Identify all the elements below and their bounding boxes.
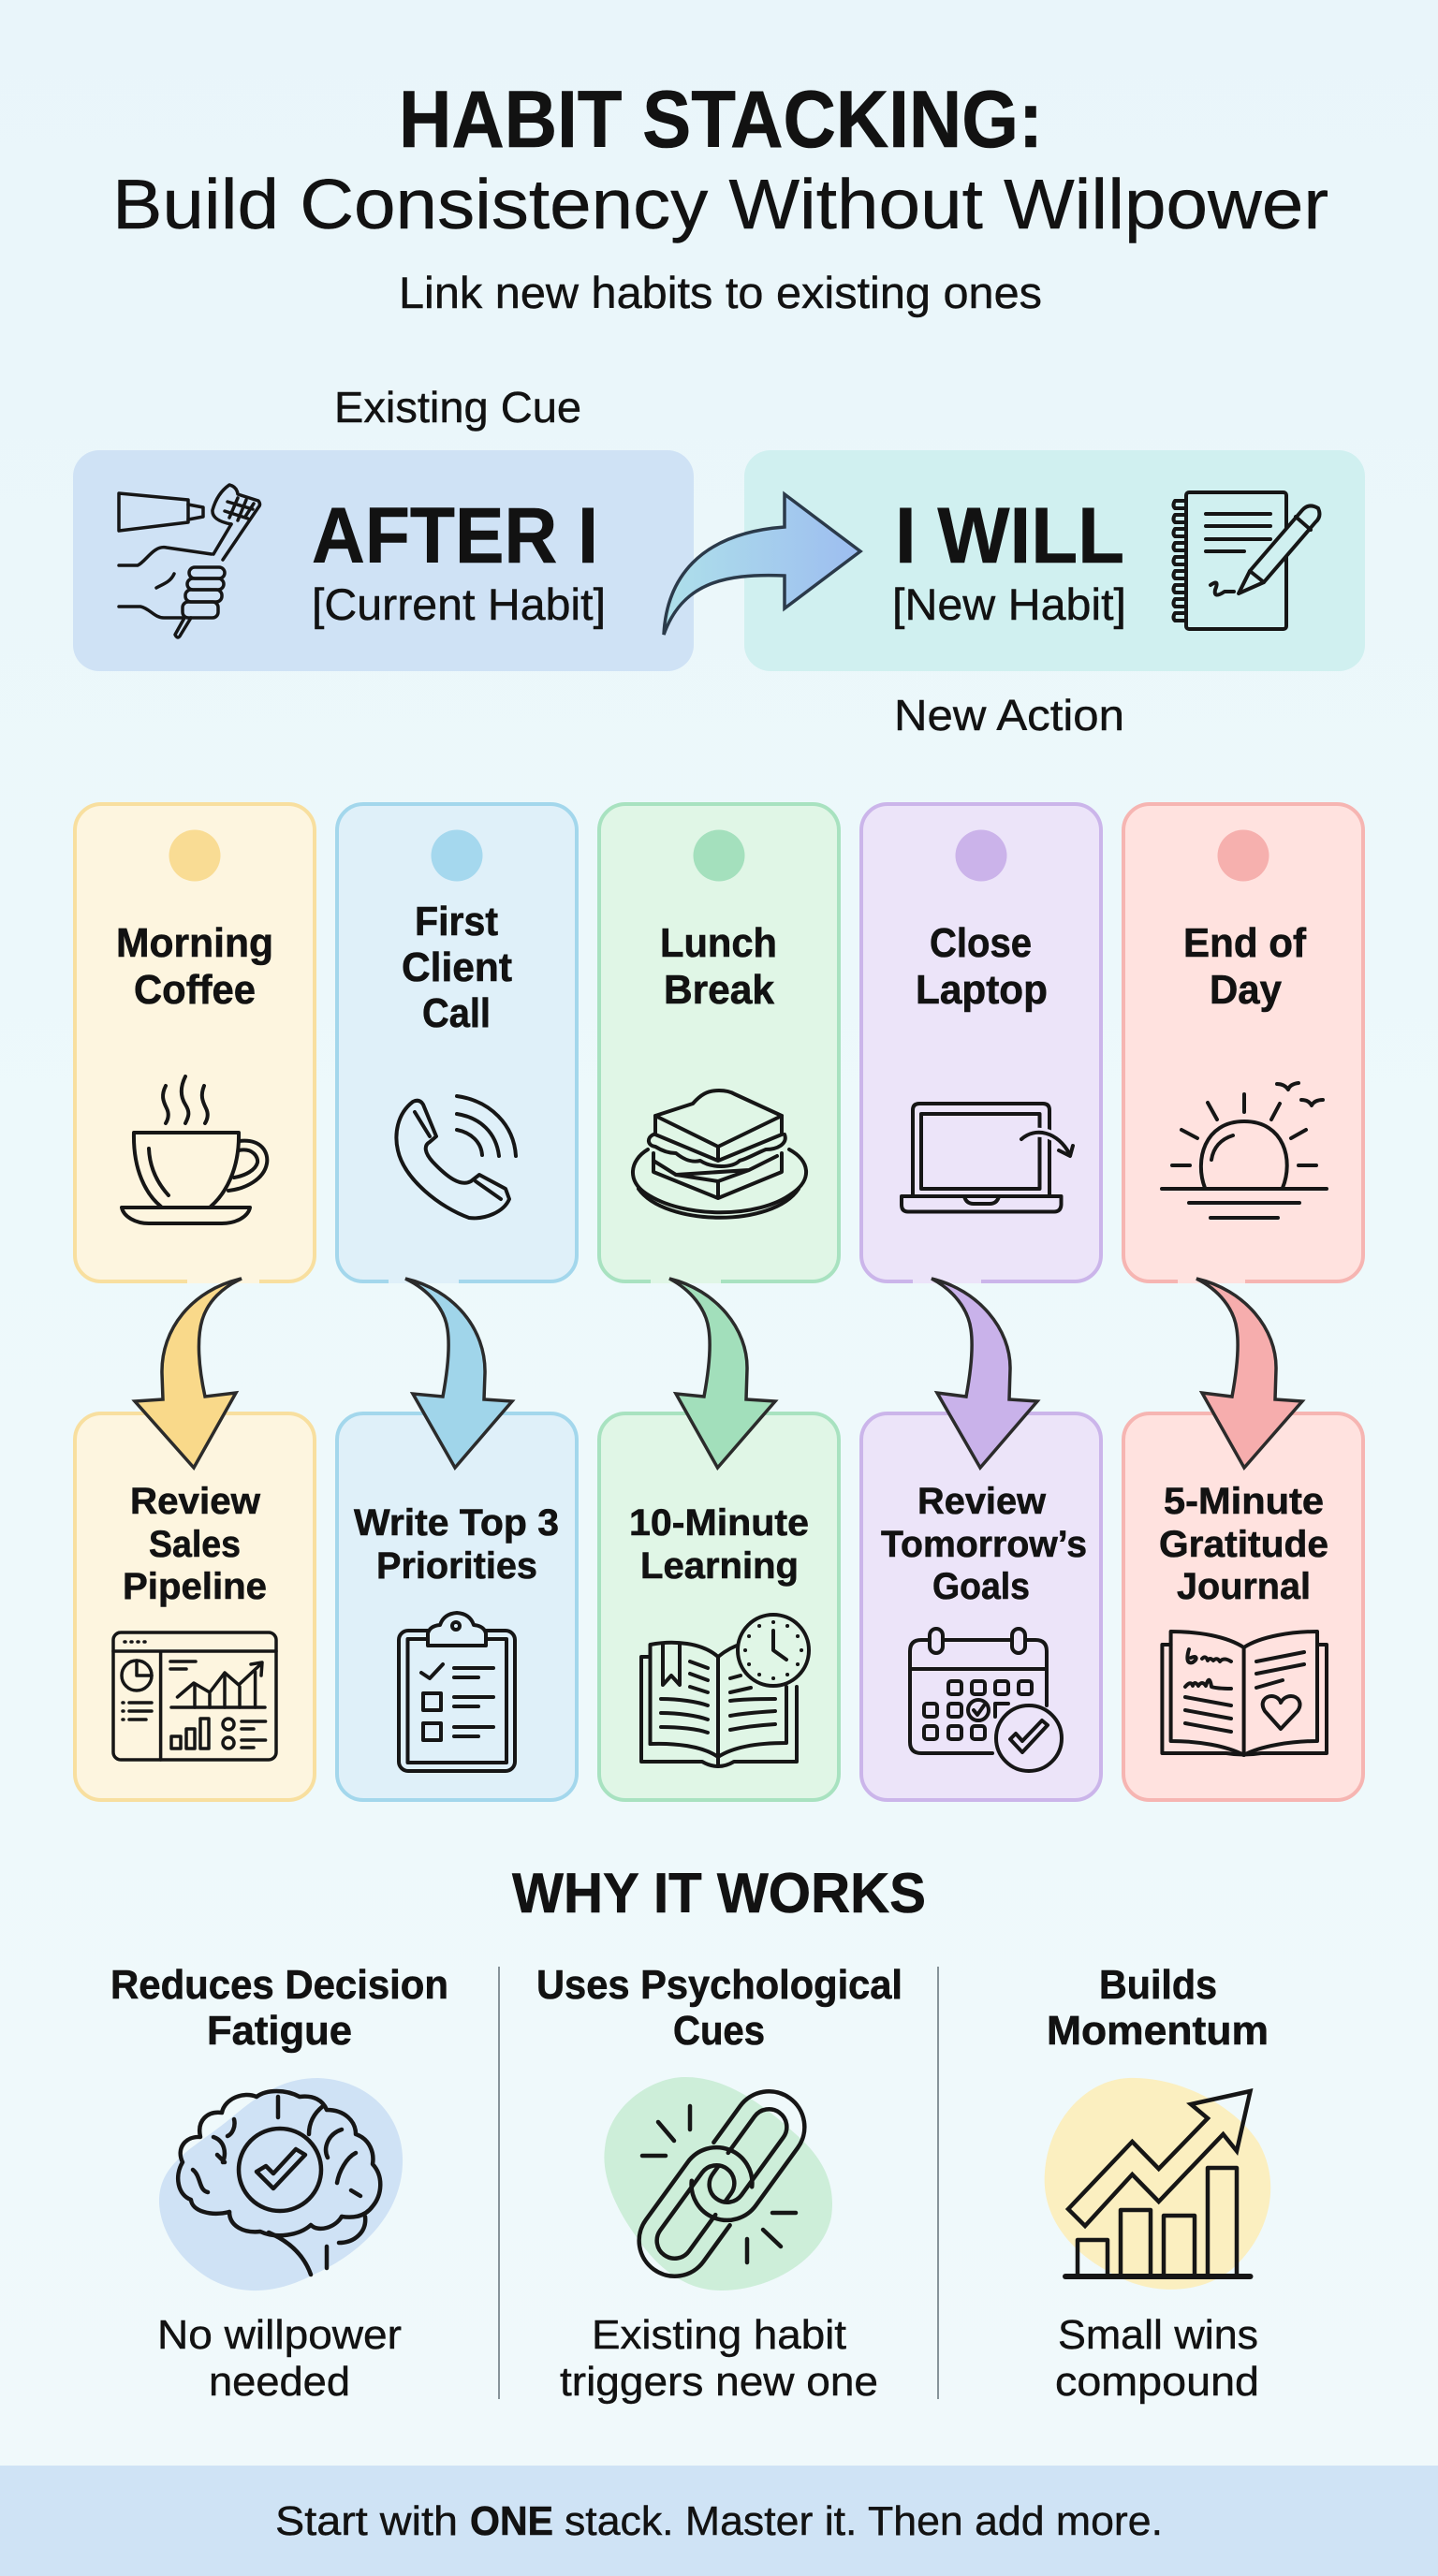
- label: [881, 1481, 1087, 1607]
- caption: Existing habit: [592, 2312, 846, 2358]
- arrow: close laptop to review tomorrow's goals: [932, 1279, 1037, 1468]
- footer banner: [0, 2466, 1438, 2576]
- label: End of: [1183, 920, 1306, 966]
- label: Tomorrow’s: [881, 1524, 1087, 1565]
- subtitle: Link new habits to existing ones: [399, 268, 1042, 317]
- dot: [693, 829, 745, 882]
- title: Build Consistency Without Willpower: [112, 165, 1328, 243]
- label: Learning: [640, 1545, 799, 1587]
- dot: [1217, 829, 1269, 882]
- label: Review: [130, 1481, 261, 1522]
- text: current habit: [Current Habit]: [312, 579, 606, 629]
- panel: new habit card review tomorrow's goals: [861, 1413, 1101, 1800]
- icon: phone: [396, 1096, 516, 1218]
- caption: triggers new one: [560, 2359, 878, 2405]
- heading: Uses Psychological: [536, 1962, 902, 2008]
- heading: after I: AFTER I: [312, 491, 598, 579]
- icon: sunset: [1162, 1083, 1327, 1218]
- dot: [169, 829, 221, 882]
- icon: open book with clock: [641, 1615, 809, 1766]
- heading: Fatigue: [207, 2008, 352, 2054]
- label: [123, 1481, 267, 1607]
- divider: [499, 1967, 938, 2399]
- heading: Reduces Decision: [110, 1962, 448, 2008]
- label: [629, 1502, 809, 1587]
- icon: rising bars and arrow on yellow blob: [1045, 2078, 1270, 2290]
- dot: [431, 829, 483, 882]
- arrow: first client call to write top 3: [405, 1279, 512, 1468]
- heading: Builds: [1099, 1962, 1217, 2008]
- label: Laptop: [916, 967, 1048, 1013]
- heading: Momentum: [1047, 2008, 1269, 2054]
- icon: coffee cup: [122, 1076, 267, 1223]
- label: Review: [917, 1481, 1047, 1522]
- label: [1183, 920, 1306, 1013]
- icon: brain with check on blue blob: [159, 2078, 403, 2291]
- arrow: end of day to gratitude journal: [1196, 1279, 1302, 1468]
- label: Break: [664, 967, 775, 1013]
- label: Gratitude: [1159, 1524, 1328, 1565]
- icon: sandwich on plate: [633, 1090, 806, 1218]
- heading: [110, 1962, 448, 2054]
- heading: [1047, 1962, 1269, 2054]
- label: [402, 899, 512, 1036]
- label: [1159, 1481, 1328, 1607]
- label: Client: [402, 944, 512, 990]
- label: 5-Minute: [1164, 1481, 1324, 1522]
- heading: I will: I WILL: [895, 491, 1124, 579]
- label: Write Top 3: [354, 1502, 559, 1544]
- caption: Small wins: [1058, 2312, 1258, 2358]
- panel: cue card first client call: [337, 804, 577, 1283]
- footer text: stack. Master it. Then add more.: [565, 2498, 1163, 2544]
- heading: [536, 1962, 902, 2054]
- heading: Cues: [673, 2008, 765, 2054]
- label: Priorities: [376, 1545, 537, 1587]
- label: Close: [930, 920, 1032, 966]
- label: Day: [1210, 967, 1283, 1013]
- icon: gratitude journal: [1162, 1632, 1327, 1755]
- panel: uses psychological cues: [536, 1962, 902, 2405]
- footer text: ONE: [470, 2498, 553, 2544]
- caption: compound: [1055, 2359, 1259, 2405]
- panel: new habit card review sales pipeline: [75, 1413, 315, 1800]
- title: HABIT STACKING:: [399, 75, 1043, 165]
- label: Morning: [116, 920, 273, 966]
- arrow: after I to I will: [664, 494, 860, 635]
- icon: chain link on green blob: [604, 2077, 832, 2291]
- panel: cue card morning coffee: [75, 804, 315, 1283]
- icon: dashboard: [113, 1632, 276, 1760]
- label: [354, 1502, 559, 1587]
- panel: reduces decision fatigue: [110, 1962, 448, 2405]
- panel: cue card lunch break: [599, 804, 839, 1283]
- label: [660, 920, 777, 1013]
- label: Journal: [1177, 1566, 1311, 1607]
- arrow: morning coffee to review sales pipeline: [135, 1279, 242, 1468]
- label: Pipeline: [123, 1566, 267, 1607]
- caption: [560, 2312, 878, 2405]
- icon: toothpaste and toothbrush in hand: [119, 485, 260, 637]
- icon: clipboard checklist: [399, 1613, 515, 1771]
- caption: needed: [209, 2359, 350, 2405]
- label: new action: New Action: [894, 691, 1124, 739]
- label: 10-Minute: [629, 1502, 809, 1544]
- panel: new habit card write top 3 priorities: [337, 1413, 577, 1800]
- label: Coffee: [134, 967, 256, 1013]
- label: Call: [422, 990, 491, 1036]
- panel: builds momentum: [1045, 1962, 1270, 2405]
- label: Lunch: [660, 920, 777, 966]
- caption: [157, 2312, 402, 2405]
- caption: [1055, 2312, 1259, 2405]
- label: First: [415, 899, 498, 944]
- icon: laptop: [902, 1104, 1073, 1211]
- panel: I will: [744, 450, 1365, 671]
- panel: new habit card 5-minute gratitude journal: [1123, 1413, 1363, 1800]
- arrow: lunch break to 10-minute learning: [669, 1279, 775, 1468]
- title: [112, 75, 1328, 243]
- label: [916, 920, 1048, 1013]
- label: existing cue: Existing Cue: [334, 383, 581, 432]
- panel: new habit card 10-minute learning: [599, 1413, 839, 1800]
- footer text: Start with: [275, 2498, 458, 2544]
- panel: cue card close laptop: [861, 804, 1101, 1283]
- icon: notebook and pen: [1174, 492, 1319, 629]
- icon: calendar with check: [910, 1629, 1062, 1771]
- label: Sales: [149, 1524, 241, 1565]
- label: Goals: [932, 1566, 1030, 1607]
- text: new habit: [New Habit]: [892, 579, 1126, 629]
- footer text: [275, 2498, 1163, 2544]
- caption: No willpower: [157, 2312, 402, 2358]
- dot: [955, 829, 1007, 882]
- label: [116, 920, 273, 1013]
- heading: why it works: WHY IT WORKS: [512, 1862, 926, 1925]
- panel: after I: [73, 450, 694, 671]
- panel: cue card end of day: [1123, 804, 1363, 1283]
